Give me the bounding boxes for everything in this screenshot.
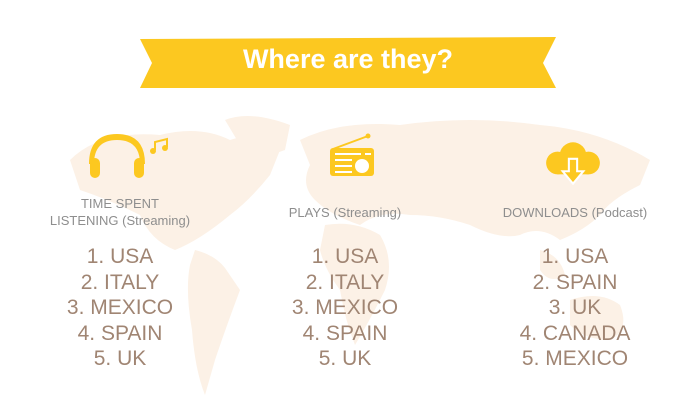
list: time spent listening: 3. MEXICO	[67, 296, 173, 319]
list: time spent listening: 4. SPAIN	[78, 322, 162, 345]
list: downloads	[520, 245, 630, 370]
list: time spent listening: 2. ITALY	[81, 271, 159, 294]
list: time spent listening: 5. UK	[94, 347, 146, 370]
icon: headphones	[89, 134, 168, 178]
list: plays: 2. ITALY	[306, 271, 384, 294]
list: time spent listening: 1. USA	[87, 245, 153, 268]
list: downloads: 1. USA	[542, 245, 608, 268]
list: plays: 3. MEXICO	[292, 296, 398, 319]
heading: time spent listening: TIME SPENT	[81, 196, 159, 211]
heading: time spent listening	[50, 196, 190, 228]
title banner	[140, 37, 556, 88]
list: plays: 5. UK	[319, 347, 371, 370]
heading: time spent listening: LISTENING (Streaming)	[50, 213, 190, 228]
list: plays: 4. SPAIN	[303, 322, 387, 345]
icon: cloud download	[546, 142, 600, 185]
list: plays	[292, 245, 398, 370]
list: time spent listening	[67, 245, 173, 370]
list: plays: 1. USA	[312, 245, 378, 268]
heading: downloads: DOWNLOADS (Podcast)	[503, 205, 647, 220]
list: downloads: 3. UK	[549, 296, 601, 319]
icon: radio	[330, 134, 374, 176]
heading: plays: PLAYS (Streaming)	[289, 205, 401, 220]
title: Where are they?	[243, 44, 453, 74]
list: downloads: 4. CANADA	[520, 322, 630, 345]
list: downloads: 2. SPAIN	[533, 271, 617, 294]
list: downloads: 5. MEXICO	[522, 347, 628, 370]
